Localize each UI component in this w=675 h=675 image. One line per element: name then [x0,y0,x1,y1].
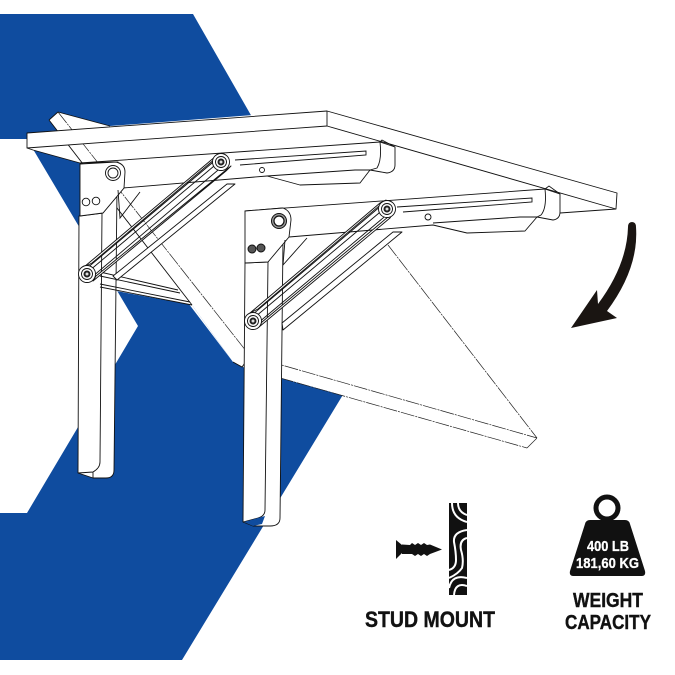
rear bolt [106,166,120,180]
weight ring [596,497,618,519]
icon: stud with wood grain [449,503,467,595]
front folding bracket [243,186,560,526]
icon: weight [570,497,645,576]
weight body [570,520,645,576]
front nuts [248,244,265,253]
arrow: folding direction [571,222,636,328]
rear folding bracket [78,140,395,478]
label: weight capacity: WEIGHT [573,590,643,612]
table top [27,111,617,213]
rear lower link [100,272,192,305]
front bracket leg [243,240,283,526]
icon: screw [396,540,442,559]
front struts [250,200,394,327]
rear bracket plate [80,162,125,216]
rear bracket leg [78,188,124,478]
rear nuts [82,197,100,206]
front joints [244,200,396,330]
rear struts [84,153,231,281]
label: weight capacity [565,590,652,634]
front arm hole [425,214,431,220]
weight value kg: 181,60 KG [576,555,639,572]
folded table panel outline [49,112,537,448]
rear bracket arm [80,142,395,188]
front diagonal brace [282,232,402,330]
front bracket plate [245,208,291,263]
front bracket arm [245,189,560,237]
weight value lb: 400 LB [587,538,629,555]
rear diagonal brace [113,184,235,280]
rear joints [78,154,230,282]
label: stud mount: STUD MOUNT [365,607,495,632]
front bolt [272,214,286,228]
label: weight capacity: CAPACITY [565,612,652,634]
